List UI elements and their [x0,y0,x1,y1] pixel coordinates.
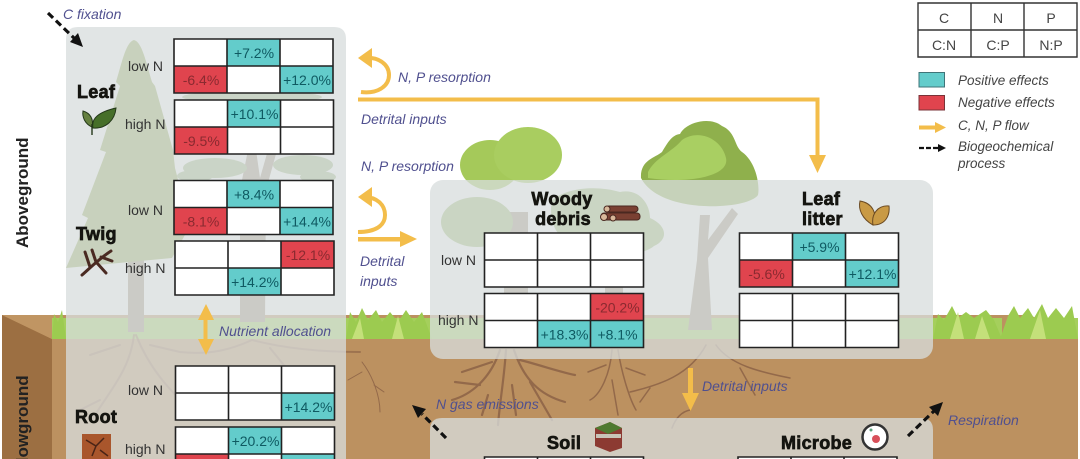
grid: leaf high N: -9.5% [183,133,220,149]
pool label: Root: Root [75,407,117,427]
grid: root high N: +20.2% [232,433,279,449]
label: leaf low N: low N [128,58,163,74]
legend: positive effects [919,72,1049,88]
arrow: lower N, P resorption loop [358,187,385,232]
grid: soil [484,457,644,459]
grid: twig high N: -12.1% [286,247,330,263]
grid: root high N [176,427,334,459]
legend key grid: C:N [932,37,956,53]
legend key grid: C [939,10,949,26]
legend: biogeochemical process [919,139,1054,171]
legend: positive effects: Positive effects [958,73,1049,88]
label: upper N, P resorption: N, P resorption [398,69,491,85]
legend key grid [918,3,1077,57]
arrow: N gas emissions [412,405,446,438]
grid: twig low N: +8.4% [234,186,274,202]
grid: twig low N: -8.1% [183,214,219,230]
grid: twig high N [175,241,334,295]
arrow: C fixation [48,13,83,47]
arrow: detrital flow to leaf litter [358,100,826,173]
pool label: Leaf: Leaf [77,82,116,102]
label: side detrital inputs: inputs [360,273,397,289]
tree: large right tree [641,121,758,330]
pool label: Soil: Soil [547,433,581,453]
grid: twig high N: +14.2% [231,274,279,290]
icon: soil cube [595,422,622,452]
grid: leaf litter low N [740,233,898,287]
arrow: detrital flow to woody debris [358,231,417,247]
label: N gas emissions: N gas emissions [436,396,539,412]
grid: leaf high N: +10.1% [231,106,278,122]
legend: biogeochemical process: Biogeochemical [958,139,1054,154]
pool label: Twig: Twig [76,224,117,244]
grid: twig low N: +14.4% [283,214,331,230]
legend: negative effects: Negative effects [958,95,1055,110]
label: side detrital inputs: Detrital [360,253,405,269]
grid: woody high N: +8.1% [597,326,638,342]
icon: twig [82,250,112,275]
label: woody high N: high N [438,312,478,328]
label: woody low N: low N [441,252,476,268]
legend key grid: P [1046,10,1056,26]
grid: leaf litter high N [740,294,898,348]
roots [80,335,790,428]
arrow: upper N, P resorption loop [358,48,389,92]
pool label: Woody debris: Woody [531,189,593,209]
label: upper detrital inputs: Detrital inputs [361,111,447,127]
icon: root soil [82,434,111,459]
label: root low N: low N [128,382,163,398]
label: leaf high N: high N [125,116,165,132]
grid: root low N [176,366,334,420]
grid: microbe [738,457,897,459]
legend: flow [919,118,1030,133]
legend: flow: C, N, P flow [958,118,1030,133]
grid: leaf litter low N: +5.9% [799,239,840,255]
grid: woody high N: +18.3% [541,326,588,342]
grid: root low N: +14.2% [285,399,332,415]
panel: aboveground and root pools [66,27,346,459]
grid: leaf litter low N: -5.6% [748,266,785,282]
label: twig low N: low N [128,202,163,218]
icon: microbe [862,424,888,450]
grid: leaf high N [174,100,334,154]
arrow: respiration [908,402,943,436]
icon: leaf litter [860,201,889,225]
grid: leaf low N: +12.0% [283,72,331,88]
ground: soil block [2,315,1078,459]
label: root high N: high N [125,441,165,457]
label: twig high N: high N [125,260,165,276]
grid: woody high N: -20.2% [595,300,640,316]
pool label: Leaf litter: Leaf [802,189,841,209]
legend key grid: C:P [986,37,1010,53]
tree: conifer behind panel [66,40,190,332]
grid: leaf litter low N: +12.1% [849,266,896,282]
pool label: Woody debris: debris [535,209,591,229]
grid: leaf low N: -6.4% [183,72,219,88]
pool label: Microbe: Microbe [781,433,852,453]
label: lower N, P resorption: N, P resorption [361,158,454,174]
grid: twig low N [174,180,333,234]
heading: Aboveground: Aboveground [13,138,32,248]
panel: soil and microbe [430,418,933,459]
label: C fixation: C fixation [63,6,122,22]
arrow: detrital flow to soil [682,368,699,411]
panel: woody debris and leaf litter [430,180,933,359]
trees: woody debris area [441,127,664,337]
grid: leaf low N [174,39,333,93]
pool label: Leaf litter: litter [802,209,843,229]
icon: leaf [83,108,116,135]
legend: biogeochemical process: process [957,156,1006,171]
grid: woody high N [484,294,644,348]
grid: woody low N [484,233,644,287]
grid: leaf low N: +7.2% [234,45,274,61]
grass strip [52,304,1078,339]
arrow: nutrient allocation [198,304,214,355]
legend key grid: N [993,10,1003,26]
icon: logs [600,206,640,221]
label: Nutrient allocation: Nutrient allocation [219,323,331,339]
tree: broadleaf behind panel [177,91,336,322]
label: lower detrital inputs: Detrital inputs [702,378,788,394]
label: Respiration: Respiration [948,412,1019,428]
legend key grid: N:P [1039,37,1063,53]
